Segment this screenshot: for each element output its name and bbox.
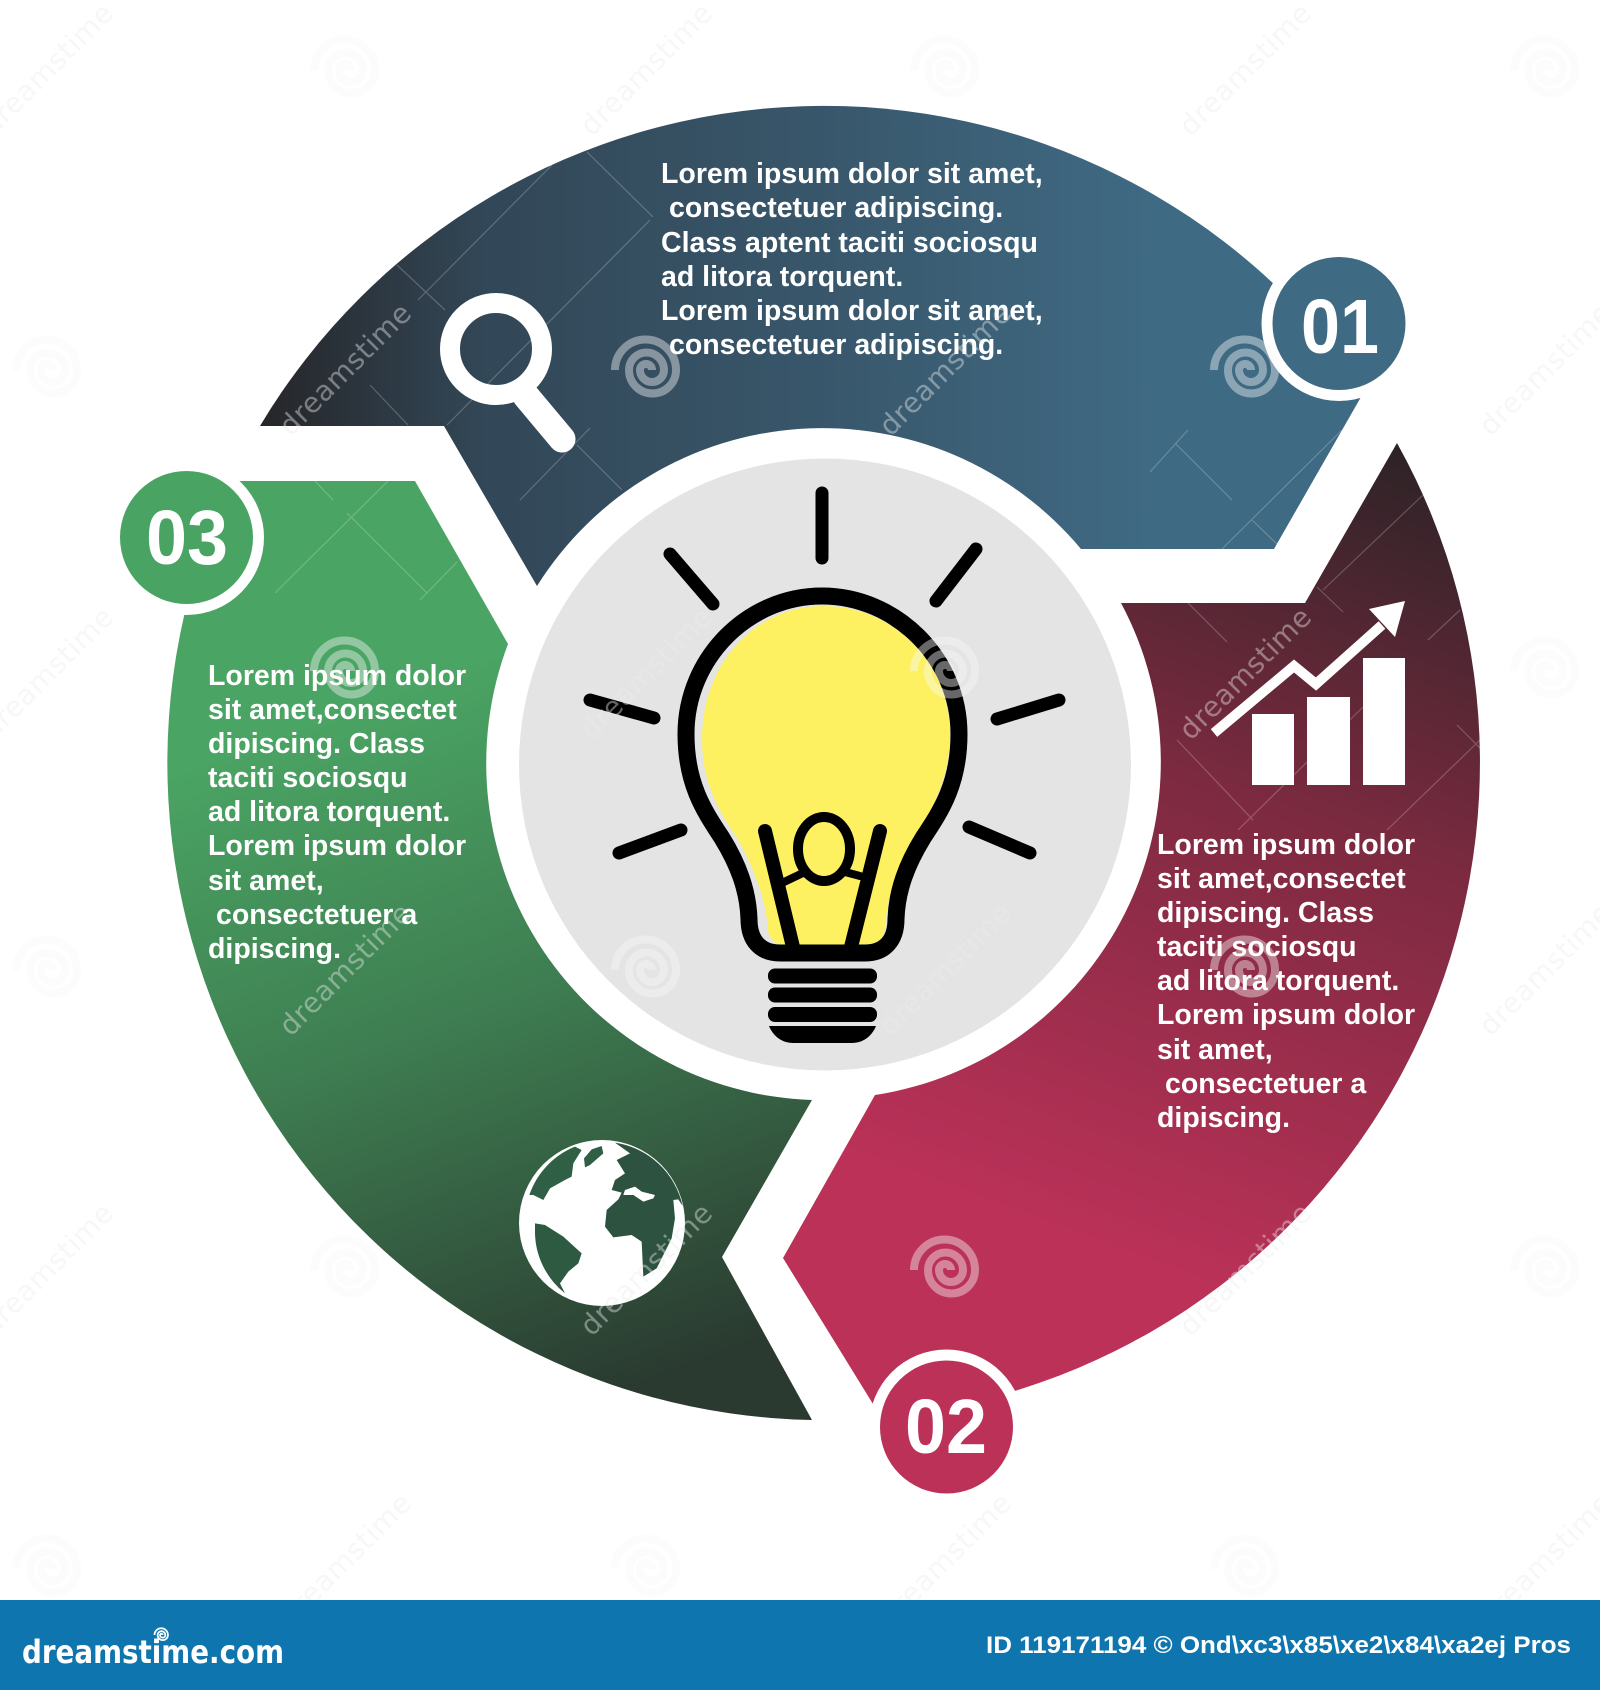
text block: step 02: Lorem ipsum dolor [1157, 999, 1415, 1031]
watermark layer: dreamstime [872, 1486, 1018, 1632]
badge: 02 [869, 1350, 1024, 1504]
filament [765, 817, 880, 947]
text block: step 02: ad litora torquent. [1157, 965, 1399, 997]
text block: step 03: sit amet,consectet [208, 694, 457, 726]
icon: bar chart with rising arrow [1214, 601, 1405, 785]
watermark layer: dreamstime [1172, 0, 1318, 142]
watermark layer: dreamstime [272, 1486, 418, 1632]
bulb glass fill [702, 606, 950, 945]
text block: step 03: consectetuer a [216, 899, 418, 931]
watermark layer: dreamstime [573, 600, 719, 746]
text block: step 02: sit amet,consectet [1157, 863, 1406, 895]
panel: step 01 blue segment [260, 106, 1365, 586]
icon: light bulb [590, 493, 1059, 1043]
icon: globe [519, 1140, 685, 1306]
text block: step 02: consectetuer a [1165, 1068, 1367, 1100]
badge: 01: 01 [1301, 284, 1379, 370]
watermark layer: dreamstime [1172, 1196, 1318, 1342]
text block: step 03: dipiscing. Class [208, 728, 425, 760]
footer logo: dreamstime.com [22, 1633, 284, 1671]
watermark layer: dreamstime [573, 1196, 719, 1342]
text block: step 03: ad litora torquent. [208, 796, 450, 828]
text block: step 01: ad litora torquent. [661, 261, 903, 293]
footer image id credit: ID 119171194 © Ond\xc3\x85\xe2\x84\xa2ej Pros [986, 1632, 1571, 1659]
text block: step 02: dipiscing. [1157, 1102, 1290, 1134]
text block: step 01: consectetuer adipiscing. [669, 329, 1003, 361]
badge: 03 [109, 460, 264, 615]
text block: step 01: consectetuer adipiscing. [669, 192, 1003, 224]
watermark layer: dreamstime [573, 0, 719, 142]
watermark layer: dreamstime [872, 896, 1018, 1042]
text block: step 01: Lorem ipsum dolor sit amet, [661, 158, 1043, 190]
panel: step 02 maroon segment [783, 443, 1480, 1417]
footer bar [0, 1600, 1600, 1690]
bulb screw base [768, 968, 877, 1043]
segment shape: green [167, 481, 812, 1420]
panel: step 03 green segment [167, 481, 812, 1420]
badge: 01 [1262, 246, 1416, 401]
text block: step 02: sit amet, [1157, 1034, 1273, 1066]
segment shape: blue [260, 106, 1365, 586]
icon: magnifying glass [450, 303, 562, 439]
light rays [590, 493, 1059, 853]
text block: step 03: Lorem ipsum dolor [208, 830, 466, 862]
center circle with light bulb [519, 458, 1131, 1070]
badge: 02: 02 [905, 1384, 987, 1470]
text block: step 03: taciti sociosqu [208, 762, 408, 794]
text block: step 03: dipiscing. [208, 933, 341, 965]
text block: step 01: Lorem ipsum dolor sit amet, [661, 295, 1043, 327]
watermark layer: dreamstime [1172, 600, 1318, 746]
segment shape: maroon [783, 443, 1480, 1417]
watermark layer: dreamstime [272, 896, 418, 1042]
watermark layer: dreamstime [272, 296, 418, 442]
text block: step 02: Lorem ipsum dolor [1157, 829, 1415, 861]
text block: step 03: sit amet, [208, 865, 324, 897]
text block: step 02: taciti sociosqu [1157, 931, 1357, 963]
bulb outline [686, 596, 959, 953]
text block: step 02: dipiscing. Class [1157, 897, 1374, 929]
watermark layer: dreamstime [872, 296, 1018, 442]
text block: step 03: Lorem ipsum dolor [208, 660, 466, 692]
text block: step 01: Class aptent taciti sociosqu [661, 227, 1038, 259]
badge: 03: 03 [146, 495, 228, 581]
